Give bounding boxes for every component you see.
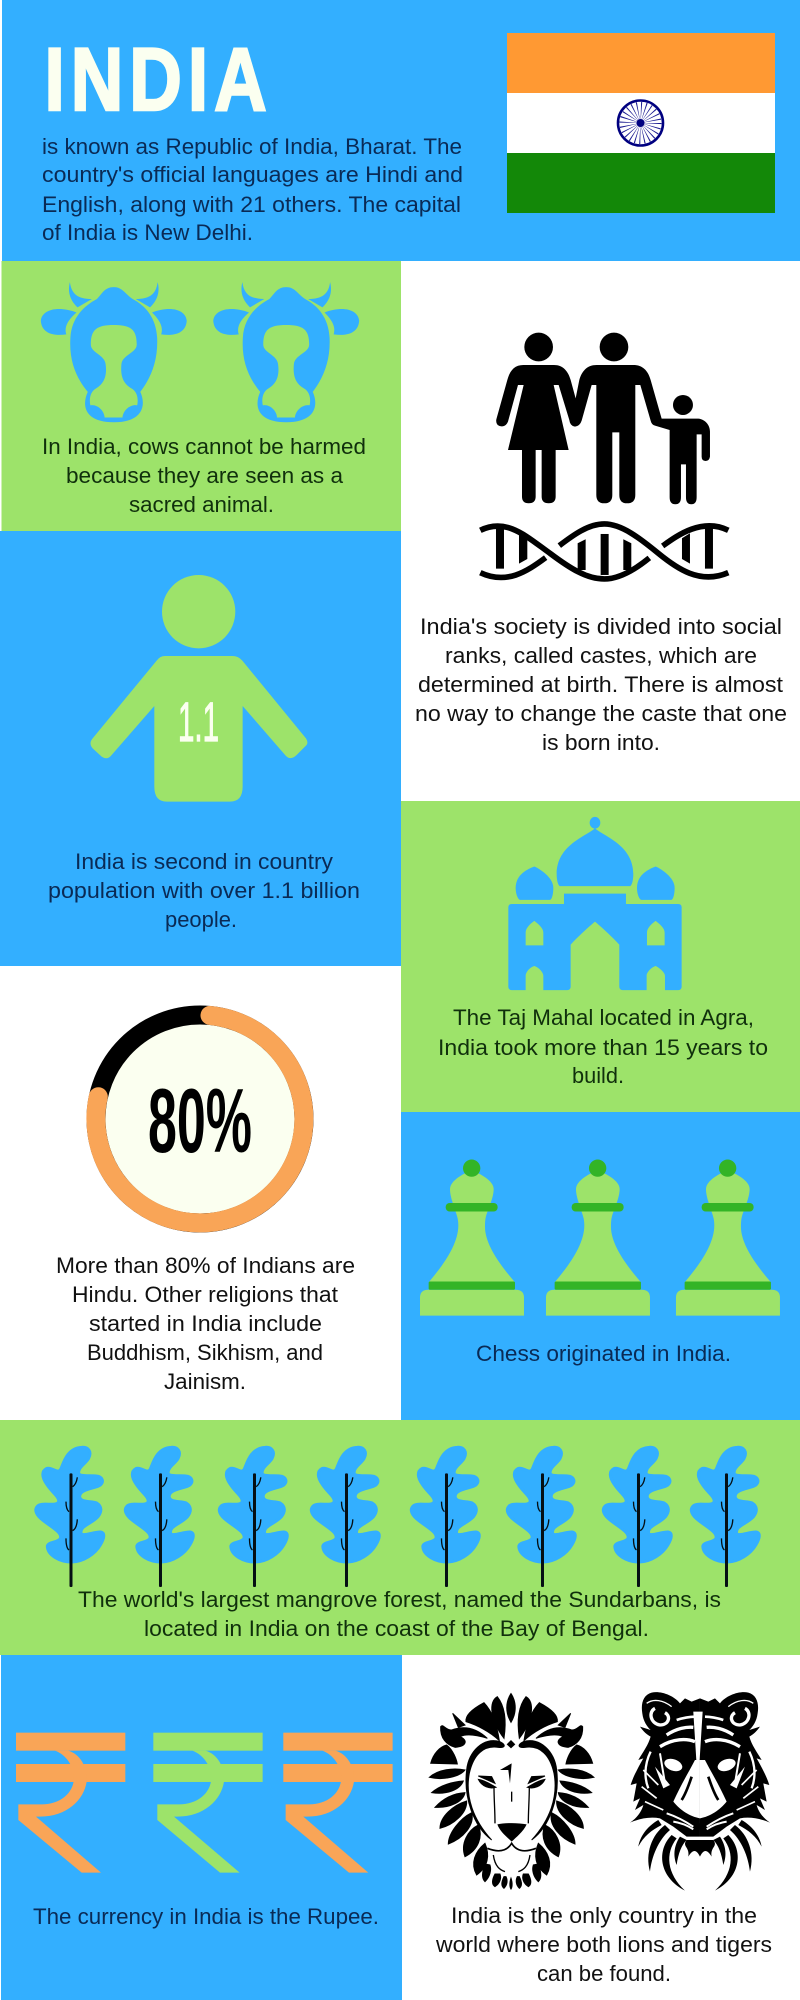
cows text <box>42 434 366 517</box>
panel: header <box>2 0 800 261</box>
castes text: determined at birth. There is almost <box>418 672 784 697</box>
intro text: English, along with 21 others. The capital <box>42 192 461 217</box>
panel: cows <box>2 261 401 531</box>
icon: three chess pawns <box>420 1160 780 1316</box>
religion text: Jainism. <box>164 1369 246 1394</box>
label: 1.1: 1.1 <box>178 690 219 753</box>
lions and tigers text: world where both lions and tigers <box>435 1932 772 1957</box>
religion text: More than 80% of Indians are <box>56 1253 355 1278</box>
panel: rupee <box>1 1655 402 2000</box>
castes text: India's society is divided into social <box>420 614 782 639</box>
icon: tiger head <box>630 1692 770 1891</box>
chart: donut 80% <box>96 1015 304 1223</box>
rupee text: The currency in India is the Rupee. <box>33 1904 379 1929</box>
population text: people. <box>165 907 237 932</box>
mangrove text <box>78 1587 721 1641</box>
icon: lion head <box>429 1693 594 1890</box>
population text <box>48 849 360 932</box>
chess text: Chess originated in India. <box>476 1341 731 1366</box>
Taj Mahal text: The Taj Mahal located in Agra, <box>453 1005 754 1030</box>
lions and tigers text: India is the only country in the <box>451 1903 757 1928</box>
religion text: Buddhism, Sikhism, and <box>87 1340 323 1365</box>
panel: chess <box>401 1112 800 1420</box>
Taj Mahal text <box>438 1005 768 1088</box>
donut value: 80% <box>148 1071 252 1172</box>
cows text: sacred animal. <box>129 492 274 517</box>
population text: India is second in country <box>75 849 334 874</box>
icon: Taj Mahal <box>508 817 682 990</box>
panel: lions and tigers <box>402 1655 800 2000</box>
Taj Mahal text: build. <box>572 1063 624 1088</box>
icon: row of eight mangrove trees <box>36 1447 759 1587</box>
lions and tigers text <box>435 1903 772 1986</box>
castes text <box>415 614 787 755</box>
mangrove text: The world's largest mangrove forest, named the Sundarbans, is <box>78 1587 721 1612</box>
religion text: Hindu. Other religions that <box>72 1282 339 1307</box>
intro text: of India is New Delhi. <box>42 220 253 245</box>
icon: family <box>496 333 710 504</box>
mangrove text: located in India on the coast of the Bay of Bengal. <box>144 1616 649 1641</box>
castes text: is born into. <box>542 730 660 755</box>
icon: flag of India <box>507 33 775 213</box>
panel: castes <box>401 261 800 801</box>
religion text <box>56 1253 355 1394</box>
castes text: no way to change the caste that one <box>415 701 787 726</box>
Taj Mahal text: India took more than 15 years to <box>438 1035 768 1060</box>
intro text: country's official languages are Hindi and <box>42 162 463 187</box>
castes text: ranks, called castes, which are <box>445 643 757 668</box>
icon: person <box>90 575 307 802</box>
panel: population <box>0 531 401 966</box>
icon: two cow heads <box>41 282 359 422</box>
population text: population with over 1.1 billion <box>48 878 360 903</box>
icon: DNA helix <box>480 524 728 579</box>
intro text <box>42 134 463 245</box>
icon: three rupee symbols <box>16 1733 393 1873</box>
cows text: In India, cows cannot be harmed <box>42 434 366 459</box>
intro text: is known as Republic of India, Bharat. The <box>42 134 462 159</box>
panel: Taj Mahal <box>401 801 800 1112</box>
cows text: because they are seen as a <box>66 463 343 488</box>
panel: mangrove forest <box>0 1420 800 1655</box>
lions and tigers text: can be found. <box>537 1961 671 1986</box>
title: INDIA <box>44 30 273 130</box>
panel: 80 percent Hindu <box>0 966 401 1420</box>
religion text: started in India include <box>89 1311 322 1336</box>
